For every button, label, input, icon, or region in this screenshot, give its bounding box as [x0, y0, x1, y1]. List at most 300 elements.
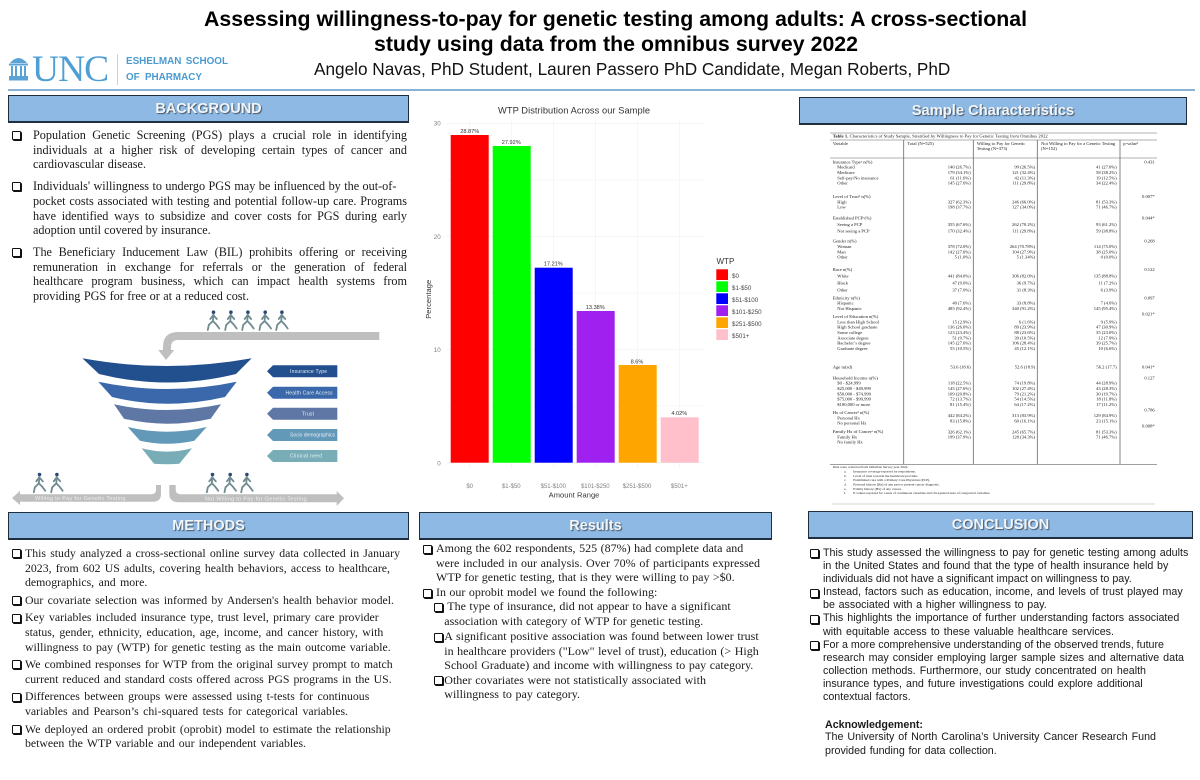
- table column: willing: 89 (23.9%): [1014, 325, 1035, 330]
- table column: willing: 246 (66.0%): [1012, 199, 1035, 204]
- table column: not willing: 12 (7.9%): [1098, 335, 1117, 340]
- bullet: future research: contextual factors.: [823, 691, 911, 703]
- table row labels: $75,000 - $99,999: [837, 397, 872, 403]
- table column: not willing: 58 (38.2%): [1096, 170, 1117, 175]
- sub-bullet: insurance type: The type of insurance, did not appear to have a significant: [447, 599, 731, 613]
- heading: methods: [8, 512, 409, 540]
- bullet: future research: [810, 639, 1184, 703]
- table column: total: 199 (37.9%): [948, 435, 971, 440]
- bullet: future research: For a more comprehensive understanding of the observed trends, future: [823, 639, 1164, 651]
- table column headers: Not Willing to Pay for a Genetic Testing: [1041, 141, 1116, 146]
- funnel layer 4: [128, 427, 207, 444]
- table footnotes: P-values reported for t-tests of continuous variables and chi-squared tests of categorical variables.: [853, 491, 990, 495]
- table column: not willing: 17 (11.2%): [1096, 402, 1117, 407]
- heading: conclusion: CONCLUSION: [952, 517, 1049, 533]
- table column: p-values: 0.008*: [1142, 423, 1155, 428]
- table column: total: 40 (7.6%): [952, 301, 971, 306]
- logo divider: [117, 54, 118, 85]
- bullet: willingness and costs: pocket costs associated with testing and potential follow-up care. Programs: [33, 194, 407, 208]
- school name: [126, 56, 228, 83]
- table column: not willing: 43 (28.3%): [1096, 386, 1117, 391]
- table column: p-values: 0.041*: [1142, 364, 1155, 369]
- table footnotes: [833, 465, 990, 495]
- bullet: covariate selection: Our covariate selection was informed by Andersen's health behavior model.: [25, 593, 394, 607]
- bullet: future research: insurance types, and future investigations could explore additional: [823, 678, 1143, 690]
- table row labels: Man: [837, 249, 846, 254]
- table column: total: 83 (15.8%): [950, 418, 971, 423]
- sub-bullet: positive association: School Graduate) and income with willingness to pay category.: [444, 658, 753, 672]
- bullet: population genetic screening: [12, 128, 407, 171]
- tag: insurance type: [267, 365, 337, 377]
- table column: not willing: 38 (25.0%): [1096, 249, 1117, 254]
- y axis title: Percentage: [424, 280, 433, 319]
- table row labels: $25,000 - $49,999: [837, 386, 872, 392]
- table column: total: 53.6 (18.6): [950, 364, 971, 369]
- heading: sample characteristics: [799, 96, 1187, 125]
- table column: p-values: 0.268: [1144, 239, 1155, 244]
- table column: total: 47 (9.0%): [952, 280, 971, 285]
- table column: p-values: 0.127: [1144, 375, 1155, 380]
- table row labels: Not Hispanic: [837, 306, 862, 311]
- table column: not willing: 41 (27.0%): [1096, 165, 1117, 170]
- bullet: willingness and costs: have identified ways to subsidize and cover costs for PGS during early: [33, 209, 407, 223]
- table row labels: High School graduate: [837, 325, 877, 330]
- bullet: respondents: WTP for genetic testing, that is they were willing to pay >$0.: [436, 570, 735, 584]
- bullet: respondents: Among the 602 respondents, 525 (87%) had complete data and: [436, 541, 743, 555]
- table: sample characteristics: [830, 132, 1157, 504]
- table column: not willing: 34 (22.4%): [1096, 181, 1117, 186]
- table column: total: 61 (11.6%): [950, 175, 971, 180]
- bullet: beneficiary inducement law: providing PGS for free or at a reduced cost.: [33, 289, 249, 303]
- legend: $0: [732, 273, 739, 280]
- table row labels: Other: [837, 181, 848, 186]
- school name: OF PHARMACY: [126, 72, 202, 83]
- table column: willing: 45 (12.1%): [1014, 346, 1035, 351]
- arrow: not willing to pay: [169, 485, 344, 506]
- bullet: other factors: be associated with a higher willingness to pay.: [823, 599, 1047, 611]
- table row labels: (%): [865, 215, 872, 220]
- bullet: oprobit model: between the WTP variable and our independent variables.: [25, 736, 306, 750]
- table footnotes: Insurance coverage reported by respondents.: [853, 470, 916, 474]
- x axis labels: $0: [466, 484, 474, 490]
- bar: $251-$500: [619, 359, 657, 463]
- tag: trust: [267, 408, 337, 420]
- bullet: study data: 2023, from 602 US adults, covering health behaviors, access to healthcare,: [25, 561, 390, 575]
- tag: clinical need: [267, 450, 337, 462]
- bullet: oprobit model: We deployed an ordered probit (oprobit) model to estimate the relationship: [25, 722, 391, 736]
- table column: willing: 121 (32.4%): [1012, 170, 1035, 175]
- bullet: oprobit model: [12, 722, 391, 750]
- table column headers: (N=152): [1041, 146, 1057, 151]
- table column: total: 72 (13.7%): [950, 397, 971, 402]
- table column: total: [948, 165, 971, 440]
- legend: $251-$500: [732, 321, 762, 328]
- table row labels: No personal Hx: [837, 421, 867, 426]
- table column: total: 37 (7.0%): [952, 287, 971, 292]
- bar: $0: [451, 129, 489, 463]
- tag: health care access: [267, 387, 337, 399]
- bullet: willingness and costs: [12, 179, 407, 237]
- table footnotes: b.: [844, 474, 847, 478]
- bullet: group differences: variables and Pearson’s chi-squared tests for categorical variables.: [25, 704, 348, 718]
- table row labels: Family Hx of Cancer: [833, 429, 872, 434]
- table column: total: 109 (20.8%): [948, 391, 971, 396]
- table row labels: Woman: [837, 244, 852, 249]
- table row labels: c: [863, 215, 865, 219]
- table column: p-values: 0.044*: [1142, 215, 1155, 220]
- table column: willing: 306 (82.0%): [1012, 274, 1035, 279]
- table column: total: 326 (62.1%): [948, 429, 971, 434]
- bullet: population genetic screening: individuals at a higher risk of developing certain types of cancer and: [33, 143, 407, 157]
- table column: not willing: 71 (46.7%): [1096, 205, 1117, 210]
- tag: insurance type: Insurance Type: [290, 369, 327, 375]
- table column: not willing: 7 (4.6%): [1101, 301, 1117, 306]
- funnel layer 2: [98, 382, 237, 404]
- bullet: study assessment: individuals did not have a significant impact on willingness to pay.: [823, 573, 1132, 585]
- table column: not willing: 81 (53.3%): [1096, 429, 1117, 434]
- bullet: group differences: Differences between groups were assessed using t-tests for continuous: [25, 689, 369, 703]
- table column: total: 327 (62.3%): [948, 199, 971, 204]
- bullet: study assessment: [810, 547, 1188, 585]
- table row labels: No family Hx: [837, 440, 864, 445]
- table column: p-values: 0.786: [1144, 408, 1155, 413]
- sub-bullet: other covariates: willingness to pay category.: [444, 687, 580, 701]
- table column headers: Willing to Pay for Genetic: [977, 141, 1025, 146]
- table column: not willing: 47 (30.9%): [1096, 325, 1117, 330]
- x axis labels: $501+: [671, 484, 688, 490]
- table column: willing: 74 (19.8%): [1014, 381, 1035, 386]
- table column: willing: 340 (91.2%): [1012, 306, 1035, 311]
- table column: not willing: 23 (15.1%): [1096, 418, 1117, 423]
- table row labels: Bachelor’s degree: [837, 341, 871, 346]
- bar: $1-$50: 27.92%: [502, 140, 521, 146]
- table column: total: 145 (27.6%): [948, 386, 971, 391]
- table column headers: Total (N=525): [907, 141, 934, 146]
- table footnotes: Established care with a Primary Care Physician (PCP).: [853, 478, 930, 482]
- table column: willing: 111 (29.8%): [1012, 229, 1035, 234]
- legend: $101-$250: [732, 309, 762, 316]
- tag: health care access: Health Care Access: [286, 390, 333, 396]
- sub-bullet: other covariates: [434, 673, 706, 701]
- bullet: importance: [810, 612, 1179, 638]
- icon: old well: [9, 58, 28, 80]
- table row labels: Other: [837, 287, 848, 292]
- table row labels: Medicaid: [837, 165, 855, 170]
- table column: total: 140 (26.7%): [948, 165, 971, 170]
- tag: socio demographics: [267, 429, 337, 441]
- bullet: combined responses: [12, 657, 393, 686]
- heading: background: [8, 95, 409, 123]
- funnel layer 5: [142, 448, 192, 464]
- table row labels: Ethnicity n(%): [833, 295, 860, 300]
- bullet: future research: research may consider employing larger sample sizes and alternative data: [823, 652, 1184, 664]
- bullet: oprobit findings: In our oprobit model we found the following:: [436, 585, 657, 599]
- bullet: willingness and costs: Individuals' willingness to undergo PGS may be influenced by the out-of-: [33, 179, 396, 193]
- table column: not willing: 6 (3.9%): [1101, 287, 1117, 292]
- table column: not willing: 35 (23.0%): [1096, 330, 1117, 335]
- title: [204, 7, 1027, 56]
- bar chart: WTP distribution: [424, 106, 762, 499]
- table column headers: Variable: [833, 141, 848, 146]
- y axis labels: 20: [434, 234, 441, 241]
- table column: not willing: 135 (88.8%): [1094, 274, 1117, 279]
- table column: total: 123 (23.4%): [948, 330, 971, 335]
- bullet: key variables: [12, 610, 391, 654]
- table column: not willing: 71 (46.7%): [1096, 435, 1117, 440]
- table column: not willing: 0 (0.0%): [1101, 255, 1117, 260]
- bullet: key variables: Key variables included insurance type, trust level, primary care provider: [25, 610, 379, 624]
- runners entering funnel: [208, 310, 288, 330]
- bar: $51-$100: [535, 262, 573, 463]
- logo wordmark UNC: UNC: [32, 49, 108, 90]
- legend: $51-$100: [732, 297, 759, 304]
- acknowledgement: Acknowledgement:: [825, 718, 923, 730]
- table row labels: $0 - $24,999: [837, 381, 861, 387]
- bar: $501+: [661, 411, 699, 463]
- y axis labels: 10: [434, 347, 441, 354]
- table footnotes: Family history (Hx) of any cancer.: [853, 487, 902, 491]
- table column: not willing: 39 (25.7%): [1096, 341, 1117, 346]
- school name: ESHELMAN SCHOOL: [126, 56, 228, 67]
- arrow: willing to pay: Willing to Pay for Genetic Testing: [35, 496, 126, 502]
- bullet: beneficiary inducement law: [12, 245, 407, 303]
- table column headers: p-value: [1123, 141, 1137, 146]
- bullet: study assessment: This study assessed the willingness to pay for genetic testing among adults: [823, 547, 1188, 559]
- bullet: beneficiary inducement law: healthcare program business, which can impact health systems from: [33, 274, 407, 288]
- runners willing: [34, 473, 63, 492]
- table row labels: n(%): [859, 410, 870, 415]
- table row labels: $50,000 - $74,999: [837, 391, 872, 397]
- tag: socio demographics: Socio demographics: [290, 433, 336, 439]
- funnel layer 1: [82, 358, 252, 382]
- x axis labels: $1-$50: [502, 484, 521, 490]
- logo: UNC Eshelman School of Pharmacy: [9, 49, 228, 90]
- bullet: importance: This highlights the importance of further understanding factors associated: [823, 612, 1179, 624]
- table column: not willing: 30 (19.7%): [1096, 391, 1117, 396]
- table column: willing: 6 (1.6%): [1019, 319, 1035, 324]
- table column: total: 378 (72.0%): [948, 244, 971, 249]
- table row labels: High: [837, 199, 847, 204]
- table column: not willing: 18 (11.8%): [1096, 397, 1117, 402]
- bullet: respondents: [423, 541, 760, 584]
- arrow: not willing to pay: Not Willing to Pay for Genetic Testing: [205, 496, 307, 502]
- legend: WTP: [716, 257, 734, 266]
- heading: results: Results: [569, 518, 622, 534]
- table column: not willing: [1094, 165, 1117, 440]
- bar: $251-$500: 8.6%: [631, 359, 643, 365]
- heading: conclusion: [808, 511, 1193, 539]
- table row labels: Low: [837, 205, 846, 210]
- table column: total: 55 (10.5%): [950, 346, 971, 351]
- table column: total: 485 (92.4%): [948, 306, 971, 311]
- table column: not willing: 56.2 (17.7): [1096, 364, 1117, 369]
- bullet: beneficiary inducement law: The Beneficiary Inducement Law (BIL) prohibits offering or receiving: [33, 245, 407, 259]
- table footnotes: d.: [844, 482, 847, 486]
- table row labels: Age m(sd): [833, 364, 853, 369]
- sub-bullet: other covariates: Other covariates were not statistically associated with: [444, 673, 706, 687]
- table footnotes: c.: [844, 478, 847, 482]
- table footnotes: f.: [844, 491, 846, 495]
- authors: Angelo Navas, PhD Student, Lauren Passero PhD Candidate, Megan Roberts, PhD: [314, 59, 950, 79]
- tag: trust: Trust: [302, 411, 315, 417]
- table column: not willing: 93 (61.2%): [1096, 222, 1117, 227]
- table column: p-values: 0.431: [1144, 159, 1155, 164]
- x axis labels: $101-$250: [581, 484, 610, 490]
- table row labels: a: [861, 159, 863, 163]
- bullet: combined responses: We combined responses for WTP from the original survey prompt to match: [25, 657, 393, 671]
- x axis title: Amount Range: [549, 490, 599, 499]
- bullet: population genetic screening: cardiovascular disease.: [33, 157, 146, 171]
- table column headers: [833, 141, 1138, 151]
- table row labels: Medicare: [837, 170, 855, 175]
- table column: total: 145 (27.6%): [948, 341, 971, 346]
- table row labels: White: [837, 274, 849, 279]
- table caption: Table 1. Characteristics of Study Sample, Stratified by Willingness to Pay for Genetic Testing from Omnibus 2022: [833, 133, 1048, 139]
- table column: willing: [1010, 165, 1035, 440]
- runners not willing: [207, 473, 253, 492]
- table column: not willing: 145 (95.4%): [1094, 306, 1117, 311]
- bullet: study assessment: in the United States and found that the type of health insurance held by: [823, 560, 1168, 572]
- table row labels: Race n(%): [833, 267, 853, 272]
- table column: not willing: 59 (38.8%): [1096, 229, 1117, 234]
- table row labels: $100,000 or more: [837, 402, 870, 408]
- table column: willing: 264 (70.78%): [1010, 244, 1035, 249]
- table column: p-values: 0.007*: [1142, 194, 1155, 199]
- legend: [716, 257, 762, 340]
- table column: total: 145 (27.6%): [948, 181, 971, 186]
- table row labels: n(%): [860, 194, 871, 199]
- table row labels: Other: [837, 255, 848, 260]
- bullet: combined responses: current reduced and standard costs offered across PGS programs in the US.: [25, 672, 392, 686]
- acknowledgement: provided funding for data collection.: [825, 744, 997, 756]
- y axis labels: 30: [434, 120, 441, 128]
- bar: $101-$250: 13.38%: [586, 305, 605, 311]
- table row labels: e: [872, 429, 874, 433]
- table column: total: 118 (22.5%): [948, 381, 971, 386]
- table column: total: 355 (67.6%): [948, 222, 971, 227]
- title: study using data from the omnibus survey 2022: [374, 32, 858, 56]
- table column: not willing: 19 (12.5%): [1096, 175, 1117, 180]
- bullet: key variables: willingness to pay (WTP) for genetic testing as the main outcome variable.: [25, 640, 391, 654]
- table column: not willing: 11 (7.2%): [1098, 280, 1117, 285]
- table footnotes: a.: [844, 470, 847, 474]
- bar: $501+: 4.02%: [671, 411, 687, 417]
- table row labels: [833, 159, 884, 445]
- table column: total: 15 (2.9%): [952, 319, 971, 324]
- bar: $1-$50: [493, 140, 531, 463]
- table column: total: 179 (34.1%): [948, 170, 971, 175]
- acknowledgement: [825, 718, 1156, 756]
- table column: total: 441 (84.0%): [948, 274, 971, 279]
- table column: willing: 64 (17.2%): [1014, 402, 1035, 407]
- table row labels: Not seeing a PCP: [837, 229, 870, 234]
- table footnotes: Level of trust towards the healthcare provider.: [853, 474, 918, 478]
- heading: background: BACKGROUND: [155, 101, 262, 117]
- bullet: other factors: [810, 586, 1183, 611]
- table column: willing: 245 (65.7%): [1012, 429, 1035, 434]
- table column: not willing: 9 (5.9%): [1101, 319, 1117, 324]
- table column: willing: 262 (70.2%): [1012, 222, 1035, 227]
- bullet: study data: demographics, and more.: [25, 575, 147, 589]
- table row labels: Less than High School: [837, 319, 880, 324]
- heading: sample characteristics: Sample Characteristics: [912, 103, 1074, 119]
- sub-bullet: positive association: in healthcare providers ("Low" level of trust), education (> High: [444, 644, 759, 658]
- bullet: key variables: status, gender, ethnicity, education, age, income, and cancer history, with: [25, 625, 383, 639]
- heading: results: [419, 512, 772, 540]
- sub-bullet: positive association: A significant positive association was found between lower trust: [444, 629, 759, 643]
- table column: willing: 127 (34.0%): [1012, 205, 1035, 210]
- table column: total: 136 (26.0%): [948, 325, 971, 330]
- funnel layer 3: [114, 404, 221, 424]
- chart title: WTP Distribution Across our Sample: [498, 106, 650, 116]
- table column: willing: 42 (11.3%): [1014, 175, 1035, 180]
- table row labels: Level of Education n(%): [833, 314, 879, 319]
- table column: p-values: [1142, 159, 1155, 428]
- bullet: population genetic screening: Population Genetic Screening (PGS) plays a crucial role in identifying: [33, 128, 407, 142]
- bullet: other factors: Instead, factors such as education, income, and levels of trust played may: [823, 586, 1183, 598]
- table column: willing: 54 (14.5%): [1014, 397, 1035, 402]
- table row labels: Hx of Cancer: [833, 410, 857, 415]
- bar: $0: 28.87%: [460, 129, 479, 135]
- table row labels: Personal Hx: [837, 415, 861, 420]
- sub-bullet: insurance type: [434, 599, 731, 628]
- table column: willing: 102 (27.4%): [1012, 386, 1035, 391]
- table row labels: Hispanic: [837, 301, 854, 306]
- table column: total: 142 (27.0%): [948, 249, 971, 254]
- table footnotes: Personal history (Hx) of any past or present cancer diagnosis.: [853, 482, 940, 486]
- table column: not willing: 10 (6.6%): [1098, 346, 1117, 351]
- legend: $1-$50: [732, 285, 752, 292]
- bullet: study data: This study analyzed a cross-sectional online survey data collected in January: [25, 546, 400, 560]
- table column: total: 198 (37.7%): [948, 205, 971, 210]
- table column: willing: 128 (34.3%): [1012, 435, 1035, 440]
- table row labels: Associate degree: [837, 335, 869, 340]
- tag: clinical need: Clinical need: [290, 454, 322, 460]
- table column: willing: 106 (28.4%): [1012, 341, 1035, 346]
- table column: willing: 31 (8.3%): [1017, 287, 1035, 292]
- table row labels: Self-pay/No insurance: [837, 175, 879, 180]
- sub-bullet: insurance type: association with category of WTP for genetic testing.: [444, 614, 703, 628]
- table row labels: n(%): [862, 159, 873, 164]
- table row labels: n(%): [873, 429, 884, 434]
- bar: $101-$250: [577, 305, 615, 463]
- table column headers: f: [1137, 141, 1138, 145]
- table column: willing: 39 (10.5%): [1014, 335, 1035, 340]
- y axis labels: [434, 120, 441, 468]
- table column: total: 5 (1.0%): [955, 255, 971, 260]
- table row labels: Insurance Type: [833, 159, 861, 164]
- table column: not willing: 44 (28.9%): [1096, 381, 1117, 386]
- table row labels: Seeing a PCP: [837, 222, 863, 227]
- arrow: willing to pay: [12, 485, 161, 505]
- table column: p-values: 0.122: [1144, 267, 1155, 272]
- table column: p-values: 0.097: [1144, 295, 1155, 300]
- bar: $51-$100: 17.21%: [544, 262, 563, 268]
- table row labels: d: [857, 410, 859, 414]
- table column: willing: 104 (27.9%): [1012, 249, 1035, 254]
- table column: not willing: 129 (84.9%): [1094, 413, 1117, 418]
- bullet: respondents: were included in our analysis. Over 70% of participants expressed: [436, 556, 760, 570]
- table column: not willing: 81 (53.3%): [1096, 199, 1117, 204]
- bullet: group differences: [12, 689, 369, 718]
- table row labels: Level of Trust: [833, 194, 859, 199]
- x axis labels: [466, 484, 688, 490]
- funnel diagram: [12, 310, 380, 506]
- table row labels: Black: [837, 280, 849, 285]
- legend: $501+: [732, 333, 750, 340]
- y axis labels: 0: [437, 460, 441, 468]
- table column: not willing: 114 (75.0%): [1094, 244, 1117, 249]
